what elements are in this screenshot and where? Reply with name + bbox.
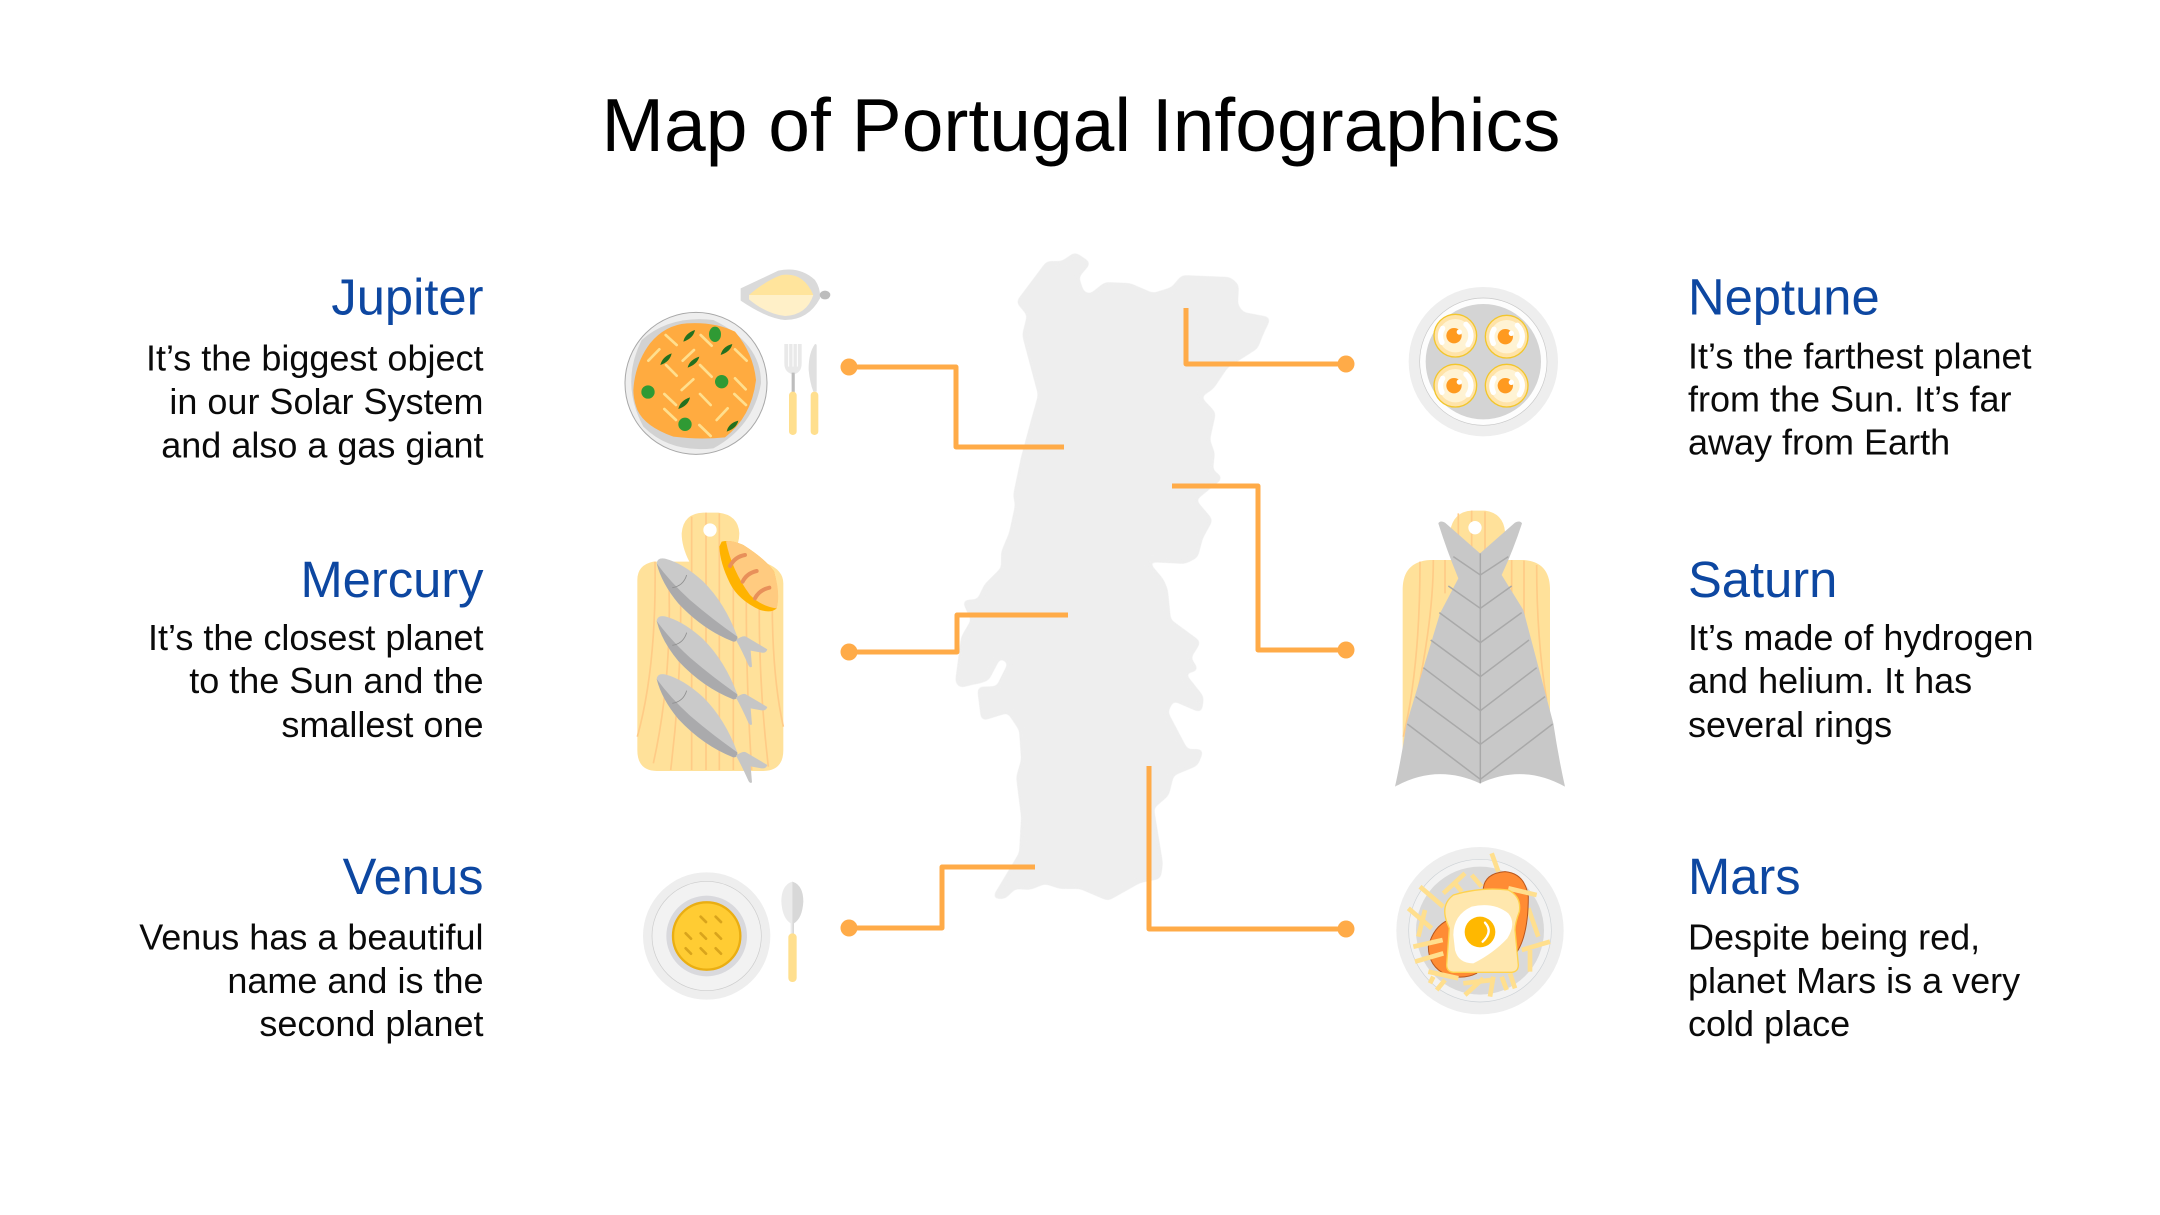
panel: Jupiter text bbox=[146, 268, 484, 466]
panel: Mars text bbox=[1688, 848, 2020, 1044]
panel: Jupiter text: and also a gas giant bbox=[161, 424, 484, 466]
panel: Venus text: Venus has a beautiful bbox=[139, 916, 484, 958]
panel: Neptune text bbox=[1688, 268, 2032, 462]
panel: Saturn text bbox=[1688, 551, 2034, 745]
connector: Neptune bbox=[1186, 308, 1354, 372]
panel: Mercury text: Mercury bbox=[300, 551, 484, 608]
panel: Jupiter text: Jupiter bbox=[331, 268, 484, 326]
panel: Neptune text: from the Sun. It’s far bbox=[1688, 378, 2011, 420]
panel: Venus text bbox=[139, 848, 484, 1044]
connector: Mars bbox=[1149, 766, 1354, 938]
panel: Venus text: Venus bbox=[343, 848, 484, 905]
connector: Saturn bbox=[1172, 486, 1354, 658]
panel: Saturn text: and helium. It has bbox=[1688, 660, 1972, 701]
panel: Mercury text: smallest one bbox=[281, 704, 484, 745]
panel: Neptune text: Neptune bbox=[1688, 268, 1880, 326]
connector: Mercury bbox=[840, 615, 1068, 660]
panel: Jupiter text: It’s the biggest object bbox=[146, 338, 484, 378]
title: Map of Portugal Infographics bbox=[602, 83, 1560, 167]
icon: soup plate with spoon bbox=[643, 872, 803, 1000]
panel: Mercury text: to the Sun and the bbox=[189, 660, 484, 701]
icon: sardines on cutting board bbox=[637, 513, 783, 783]
icon: plate with egg toast and fries bbox=[1396, 847, 1564, 1014]
icon: rice dish with gravy boat and cutlery bbox=[625, 269, 830, 454]
panel: Saturn text: Saturn bbox=[1688, 551, 1837, 608]
map of Portugal bbox=[956, 253, 1270, 900]
panel: Neptune text: It’s the farthest planet bbox=[1688, 336, 2032, 376]
panel: Mercury text bbox=[148, 551, 484, 745]
icon: cod on cutting board bbox=[1395, 511, 1565, 787]
panel: Mars text: Mars bbox=[1688, 848, 1801, 905]
connector: Jupiter bbox=[840, 358, 1064, 447]
connector: Venus bbox=[840, 867, 1035, 936]
panel: Mars text: cold place bbox=[1688, 1003, 1850, 1044]
panel: Venus text: second planet bbox=[259, 1003, 484, 1044]
panel: Mercury text: It’s the closest planet bbox=[148, 617, 484, 658]
panel: Saturn text: It’s made of hydrogen bbox=[1688, 617, 2034, 658]
panel: Jupiter text: in our Solar System bbox=[169, 381, 484, 422]
panel: Mars text: Despite being red, bbox=[1688, 916, 1980, 958]
panel: Mars text: planet Mars is a very bbox=[1688, 960, 2020, 1001]
panel: Venus text: name and is the bbox=[227, 960, 484, 1001]
panel: Neptune text: away from Earth bbox=[1688, 422, 1950, 462]
icon: plate of four eggs bbox=[1409, 287, 1558, 436]
panel: Saturn text: several rings bbox=[1688, 704, 1892, 745]
